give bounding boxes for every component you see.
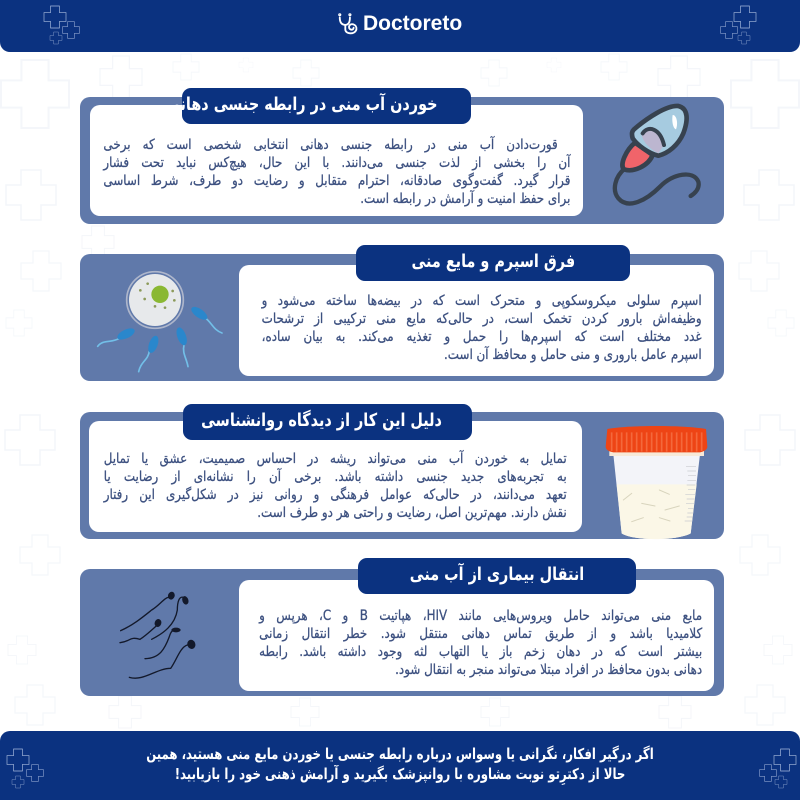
icon: dark sperm group	[119, 592, 196, 679]
title: swallowing semen	[182, 88, 471, 124]
footer call to action	[146, 745, 654, 785]
title: sperm vs semen	[356, 245, 630, 281]
icon: header crosses left	[44, 6, 79, 44]
body text: کلامیدیا باشد و از طریق تماس دهانی منتقل شود. خطر انتقال زمانی	[259, 626, 702, 642]
logo wordmark: Doctoreto	[363, 12, 462, 35]
body text: وظیفه‌اش بارور کردن تخمک است، در حالی‌که مایع منی ترکیبی از ترشحات	[262, 311, 702, 327]
icon: specimen cup	[606, 426, 708, 539]
body text: اسپرم عامل باروری و منی حامل و محافظ آن است.	[444, 347, 702, 363]
logo	[338, 12, 462, 35]
footer bar	[0, 731, 800, 800]
footer call to action: حالا از دکترِتو نوبت مشاوره با روانپزشک بگیرید و آرامش ذهنی خود را بازیابید!	[175, 765, 625, 783]
icon: egg and sperm	[96, 270, 223, 372]
header bar	[0, 0, 800, 52]
panel: sperm vs semen	[80, 254, 724, 381]
text card	[239, 580, 714, 691]
text card	[90, 105, 583, 216]
body text: غدد مختلف است که اسپرم‌ها را حمل و تغذیه می‌کند. به بیان ساده،	[262, 329, 702, 345]
body text: تمایل به خوردن آب منی می‌تواند ریشه در احساس صمیمیت، عشق یا تمایل	[104, 451, 567, 467]
title: swallowing semen: خوردن آب منی در رابطه جنسی دهانی	[166, 94, 437, 115]
icon: footer crosses left	[7, 749, 43, 788]
body text: اسپرم سلولی میکروسکوپی و متحرک است که در بیضه‌ها ساخته می‌شود و	[262, 293, 702, 309]
icon: header crosses right	[721, 6, 756, 44]
title: psychological reason	[183, 404, 472, 440]
footer call to action: اگر درگیر افکار، نگرانی یا وسواس درباره رابطه جنسی یا خوردن مایع منی هستید، همین	[146, 745, 654, 763]
title: disease transmission	[358, 558, 636, 594]
body text: نقش دارند. مهم‌ترین اصل، رضایت و راحتی هر دو طرف است.	[258, 505, 567, 521]
icon: stethoscope	[338, 13, 358, 34]
body text	[261, 293, 702, 363]
panel: psychological reason	[80, 412, 724, 539]
body text: برای حفظ امنیت و آرامش در رابطه است.	[360, 191, 570, 207]
body text: بیشتر است که در دهان زخم باز یا التهاب لثه وجود داشته باشد. رابطه	[259, 644, 702, 660]
body text: مایع منی می‌تواند حامل ویروس‌هایی مانند HIV، هپاتیت B و C، هرپس و	[259, 608, 702, 624]
title: psychological reason: دلیل این کار از دیدگاه روانشناسی	[201, 410, 442, 431]
body text: قرار گیرد. گفت‌وگوی صادقانه، احترام متقابل و رضایت دو طرف، شرط اساسی	[103, 173, 570, 189]
body text	[258, 608, 702, 678]
text card	[89, 421, 582, 532]
body text: قورت‌دادن آب منی در رابطه جنسی دهانی انتخابی شخصی است که برخی	[103, 137, 557, 153]
title: disease transmission: انتقال بیماری از آب منی	[410, 564, 584, 585]
body text: دهانی بدون محافظ در افراد مبتلا می‌تواند منجر به انتقال شود.	[395, 662, 702, 678]
title: sperm vs semen: فرق اسپرم و مایع منی	[411, 251, 575, 272]
body text: تعهد می‌دانند، در حالی‌که عوامل فرهنگی و روانی نیز در شکل‌گیری این رفتار	[104, 487, 567, 503]
body text	[103, 450, 567, 521]
icon: footer crosses right	[760, 749, 796, 788]
text card	[239, 265, 714, 376]
panel: swallowing semen in oral sex	[80, 97, 724, 224]
panel: disease transmission	[80, 569, 724, 696]
icon: sperm	[612, 104, 701, 206]
body text: آن را بخشی از لذت جنسی می‌دانند. با این حال، هیچ‌کس نباید تحت فشار	[103, 155, 570, 171]
body text: به تجربه‌های جدید جنسی داشته باشد. برخی آن را نشانه‌ای از رضایت یا	[104, 469, 567, 485]
body text	[102, 136, 571, 207]
